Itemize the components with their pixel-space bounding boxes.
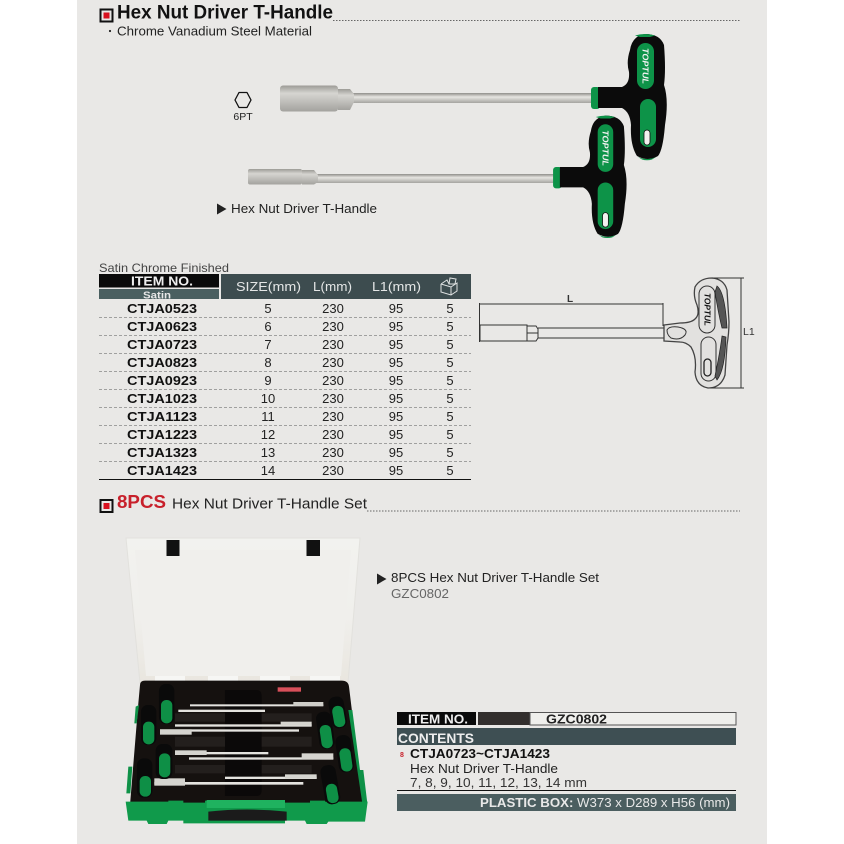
table row: 5 (446, 463, 454, 478)
heading: 8PCS set (100, 492, 740, 512)
table row: CTJA1323 (127, 446, 197, 460)
table row: 95 (389, 337, 403, 352)
diagram: dimension drawing (480, 278, 755, 388)
table header: Satin (143, 290, 171, 302)
table row: 95 (389, 445, 403, 460)
contents header: CONTENTS (398, 731, 474, 746)
table row (99, 463, 471, 480)
tool: large hex nut driver: TOPTUL (640, 48, 650, 84)
table row (99, 355, 471, 372)
photo: open plastic case (126, 538, 368, 824)
caption: set name and code: GZC0802 (391, 587, 449, 601)
table row (99, 391, 471, 408)
table row: CTJA1223 (127, 428, 197, 442)
table row: 230 (322, 445, 344, 460)
table row: 5 (446, 409, 454, 424)
table row: 5 (446, 319, 454, 334)
table row: 8 (264, 355, 272, 370)
table row: 5 (446, 337, 454, 352)
caption: set name and code: 8PCS Hex Nut Driver T-Handle Set (391, 570, 599, 585)
item number row (397, 712, 736, 726)
table row: 230 (322, 427, 344, 442)
table row: CTJA0723 (127, 338, 197, 352)
shafts (154, 702, 333, 786)
table row: 14 (261, 463, 275, 478)
table row: 6 (264, 319, 272, 334)
table row (99, 427, 471, 444)
table row: 230 (322, 355, 344, 370)
handles (137, 684, 355, 805)
table row: 13 (261, 445, 275, 460)
table row (99, 409, 471, 426)
heading: 8PCS set: Hex Nut Driver T-Handle Set (172, 496, 368, 512)
text block: material: Chrome Vanadium Steel Material (117, 24, 312, 38)
table row: 230 (322, 373, 344, 388)
contents text (397, 747, 736, 790)
item number row: GZC0802 (546, 712, 607, 726)
table row (99, 373, 471, 390)
case tray (126, 681, 368, 824)
table row: 11 (261, 409, 275, 424)
table row: 95 (389, 301, 403, 316)
table header: ITEM NO. (131, 274, 193, 288)
table row: CTJA0823 (127, 356, 197, 370)
diagram: dimension drawing: L (567, 294, 573, 305)
contents text: 8 (400, 752, 404, 759)
table row: 10 (261, 391, 275, 406)
contents text: Hex Nut Driver T-Handle (410, 761, 558, 776)
tool: large hex nut driver (280, 34, 667, 160)
diagram: dimension drawing: L1 (743, 326, 755, 338)
table row: 5 (264, 301, 272, 316)
table row: 230 (322, 337, 344, 352)
plastic box dimensions: PLASTIC BOX: W373 x D289 x H56 (mm) (480, 796, 730, 810)
table row: CTJA0923 (127, 374, 197, 388)
table header: L1(mm) (372, 279, 421, 294)
table row (99, 445, 471, 462)
tool: small hex nut driver: TOPTUL (601, 130, 610, 166)
table header (99, 274, 471, 302)
case lid (126, 538, 360, 683)
table row: CTJA1023 (127, 392, 197, 406)
table row: CTJA0623 (127, 320, 197, 334)
plastic box dimensions (397, 794, 736, 811)
table header: SIZE(mm) (236, 279, 301, 294)
table row: CTJA1423 (127, 464, 197, 478)
table row: 5 (446, 373, 454, 388)
table row: CTJA0523 (127, 302, 197, 316)
tool: small hex nut driver (248, 116, 627, 238)
caption: set name and code (377, 570, 599, 601)
diagram: dimension drawing: TOPTUL (702, 293, 712, 326)
table row: 230 (322, 301, 344, 316)
table row: 230 (322, 463, 344, 478)
table row: 5 (446, 445, 454, 460)
table header: L(mm) (313, 279, 352, 294)
table: set item details (397, 712, 736, 811)
text: finish label: Satin Chrome Finished (99, 261, 229, 275)
table row: 7 (264, 337, 272, 352)
item number row: ITEM NO. (408, 712, 468, 726)
table row: 95 (389, 427, 403, 442)
green base (126, 705, 368, 824)
table row: 230 (322, 409, 344, 424)
contents text: 7, 8, 9, 10, 11, 12, 13, 14 mm (410, 775, 587, 790)
table row: 5 (446, 391, 454, 406)
table row (99, 301, 471, 318)
icon: 6PT hexagon: 6PT (233, 111, 253, 123)
table row: 95 (389, 319, 403, 334)
icon: 6PT hexagon (233, 92, 253, 123)
table row: CTJA1123 (127, 410, 197, 424)
table row: 5 (446, 427, 454, 442)
heading: Hex Nut Driver T-Handle: Hex Nut Driver T-Handle (117, 2, 333, 24)
heading: 8PCS set: 8PCS (117, 492, 166, 512)
table row: 5 (446, 355, 454, 370)
table row: 95 (389, 409, 403, 424)
caption: Hex Nut Driver T-Handle: Hex Nut Driver T-Handle (231, 201, 377, 216)
table row: 12 (261, 427, 275, 442)
table row (99, 337, 471, 354)
table row: 95 (389, 355, 403, 370)
table: specifications (99, 274, 471, 480)
table row: 95 (389, 463, 403, 478)
heading: Hex Nut Driver T-Handle (100, 2, 740, 24)
table row: 5 (446, 301, 454, 316)
contents header (397, 728, 736, 746)
table row: 95 (389, 373, 403, 388)
contents text: CTJA0723~CTJA1423 (410, 747, 550, 761)
table row: 95 (389, 391, 403, 406)
table row (99, 319, 471, 336)
table row: 230 (322, 319, 344, 334)
table row: 9 (264, 373, 272, 388)
table row: 230 (322, 391, 344, 406)
